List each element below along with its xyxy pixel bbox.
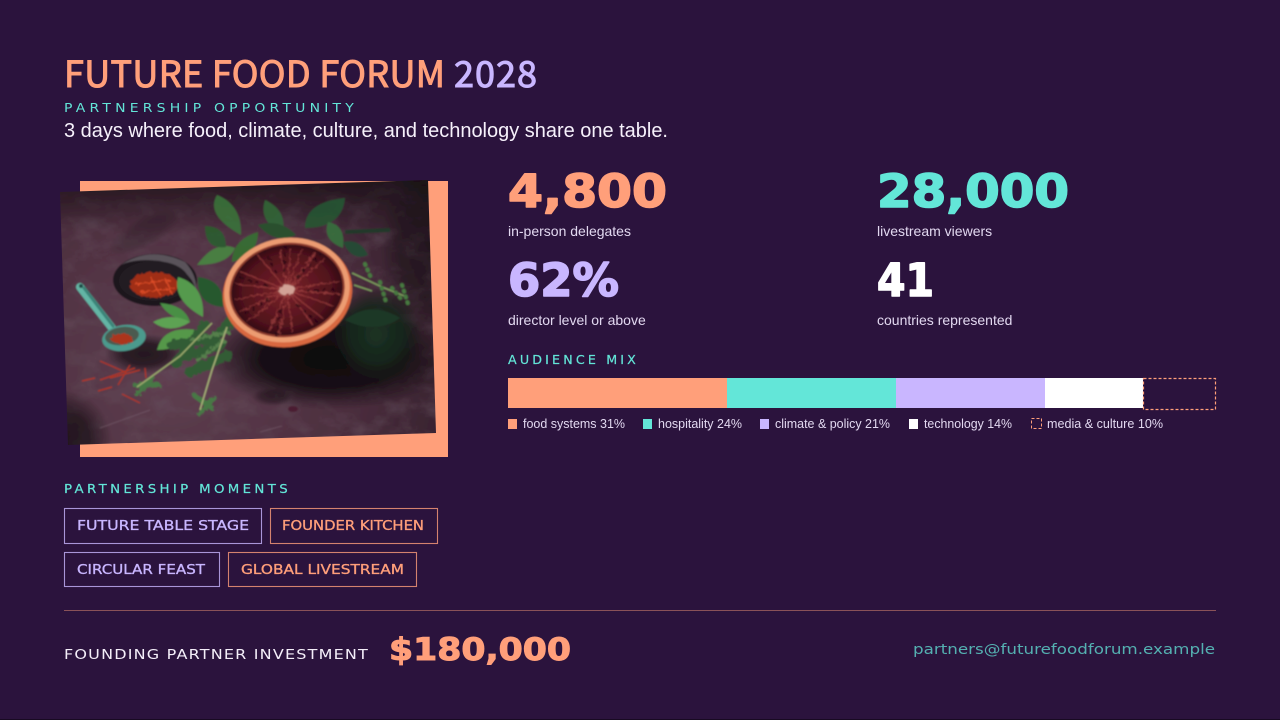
legend: technology 14%	[924, 417, 1012, 431]
puddle	[255, 390, 288, 404]
saffron threads	[82, 361, 146, 403]
stat: delegates: 4,800	[508, 165, 667, 218]
heading: audience mix: AUDIENCE MIX	[508, 353, 639, 367]
stat: seniority: director level or above	[508, 312, 646, 328]
blood orange	[222, 236, 354, 349]
stat: countries: 41	[877, 254, 934, 307]
title: FUTURE FOOD FORUM	[64, 46, 445, 98]
title: 2028	[454, 46, 537, 98]
photo backing block	[80, 181, 448, 457]
tag: future table stage	[64, 508, 262, 544]
legend: climate & policy 21%	[775, 417, 890, 431]
tagline: 3 days where food, climate, culture, and technology share one table.	[64, 120, 668, 142]
panel: key statistics	[508, 165, 1069, 328]
footer	[64, 632, 1215, 668]
tag: global livestream	[228, 552, 416, 586]
shadow	[212, 314, 434, 407]
stat: countries	[877, 254, 1012, 328]
photo: blood orange, herbs and saffron on slate	[60, 180, 436, 445]
stat: countries: countries represented	[877, 312, 1012, 328]
stat: viewers: livestream viewers	[877, 223, 992, 239]
stat: viewers: 28,000	[877, 165, 1069, 218]
bowl	[113, 254, 197, 306]
tag: circular feast	[64, 552, 220, 586]
spoon	[79, 284, 148, 354]
investment label: FOUNDING PARTNER INVESTMENT	[64, 647, 369, 663]
dark mint right	[330, 287, 422, 383]
panel: photo	[60, 180, 448, 457]
panel: audience mix	[508, 353, 1216, 431]
stat: delegates: in-person delegates	[508, 223, 631, 239]
thyme centre	[135, 320, 232, 414]
heading: partnership moments: PARTNERSHIP MOMENTS	[64, 482, 291, 496]
tag: global livestream: GLOBAL LIVESTREAM	[241, 563, 404, 578]
legend: hospitality 24%	[658, 417, 742, 431]
legend	[508, 417, 1163, 431]
thyme right	[352, 273, 407, 297]
top herbs	[197, 195, 390, 265]
header	[64, 46, 668, 142]
tag: founder kitchen: FOUNDER KITCHEN	[282, 519, 424, 534]
stat: seniority: 62%	[508, 254, 619, 307]
stacked bar chart	[508, 378, 1216, 410]
eyebrow: PARTNERSHIP OPPORTUNITY	[64, 101, 358, 115]
centre mint	[153, 277, 223, 350]
investment amount: $180,000	[389, 632, 571, 668]
tag: founder kitchen	[270, 508, 438, 544]
legend: food systems 31%	[523, 417, 625, 431]
stat: viewers	[877, 165, 1069, 239]
stat: seniority	[508, 254, 646, 328]
tag: future table stage: FUTURE TABLE STAGE	[77, 519, 249, 534]
panel: partnership moments	[64, 482, 438, 586]
contact email: partners@futurefoodforum.example	[913, 642, 1215, 658]
tag: circular feast: CIRCULAR FEAST	[77, 563, 205, 578]
legend: media & culture 10%	[1047, 417, 1163, 431]
stat: delegates	[508, 165, 667, 239]
